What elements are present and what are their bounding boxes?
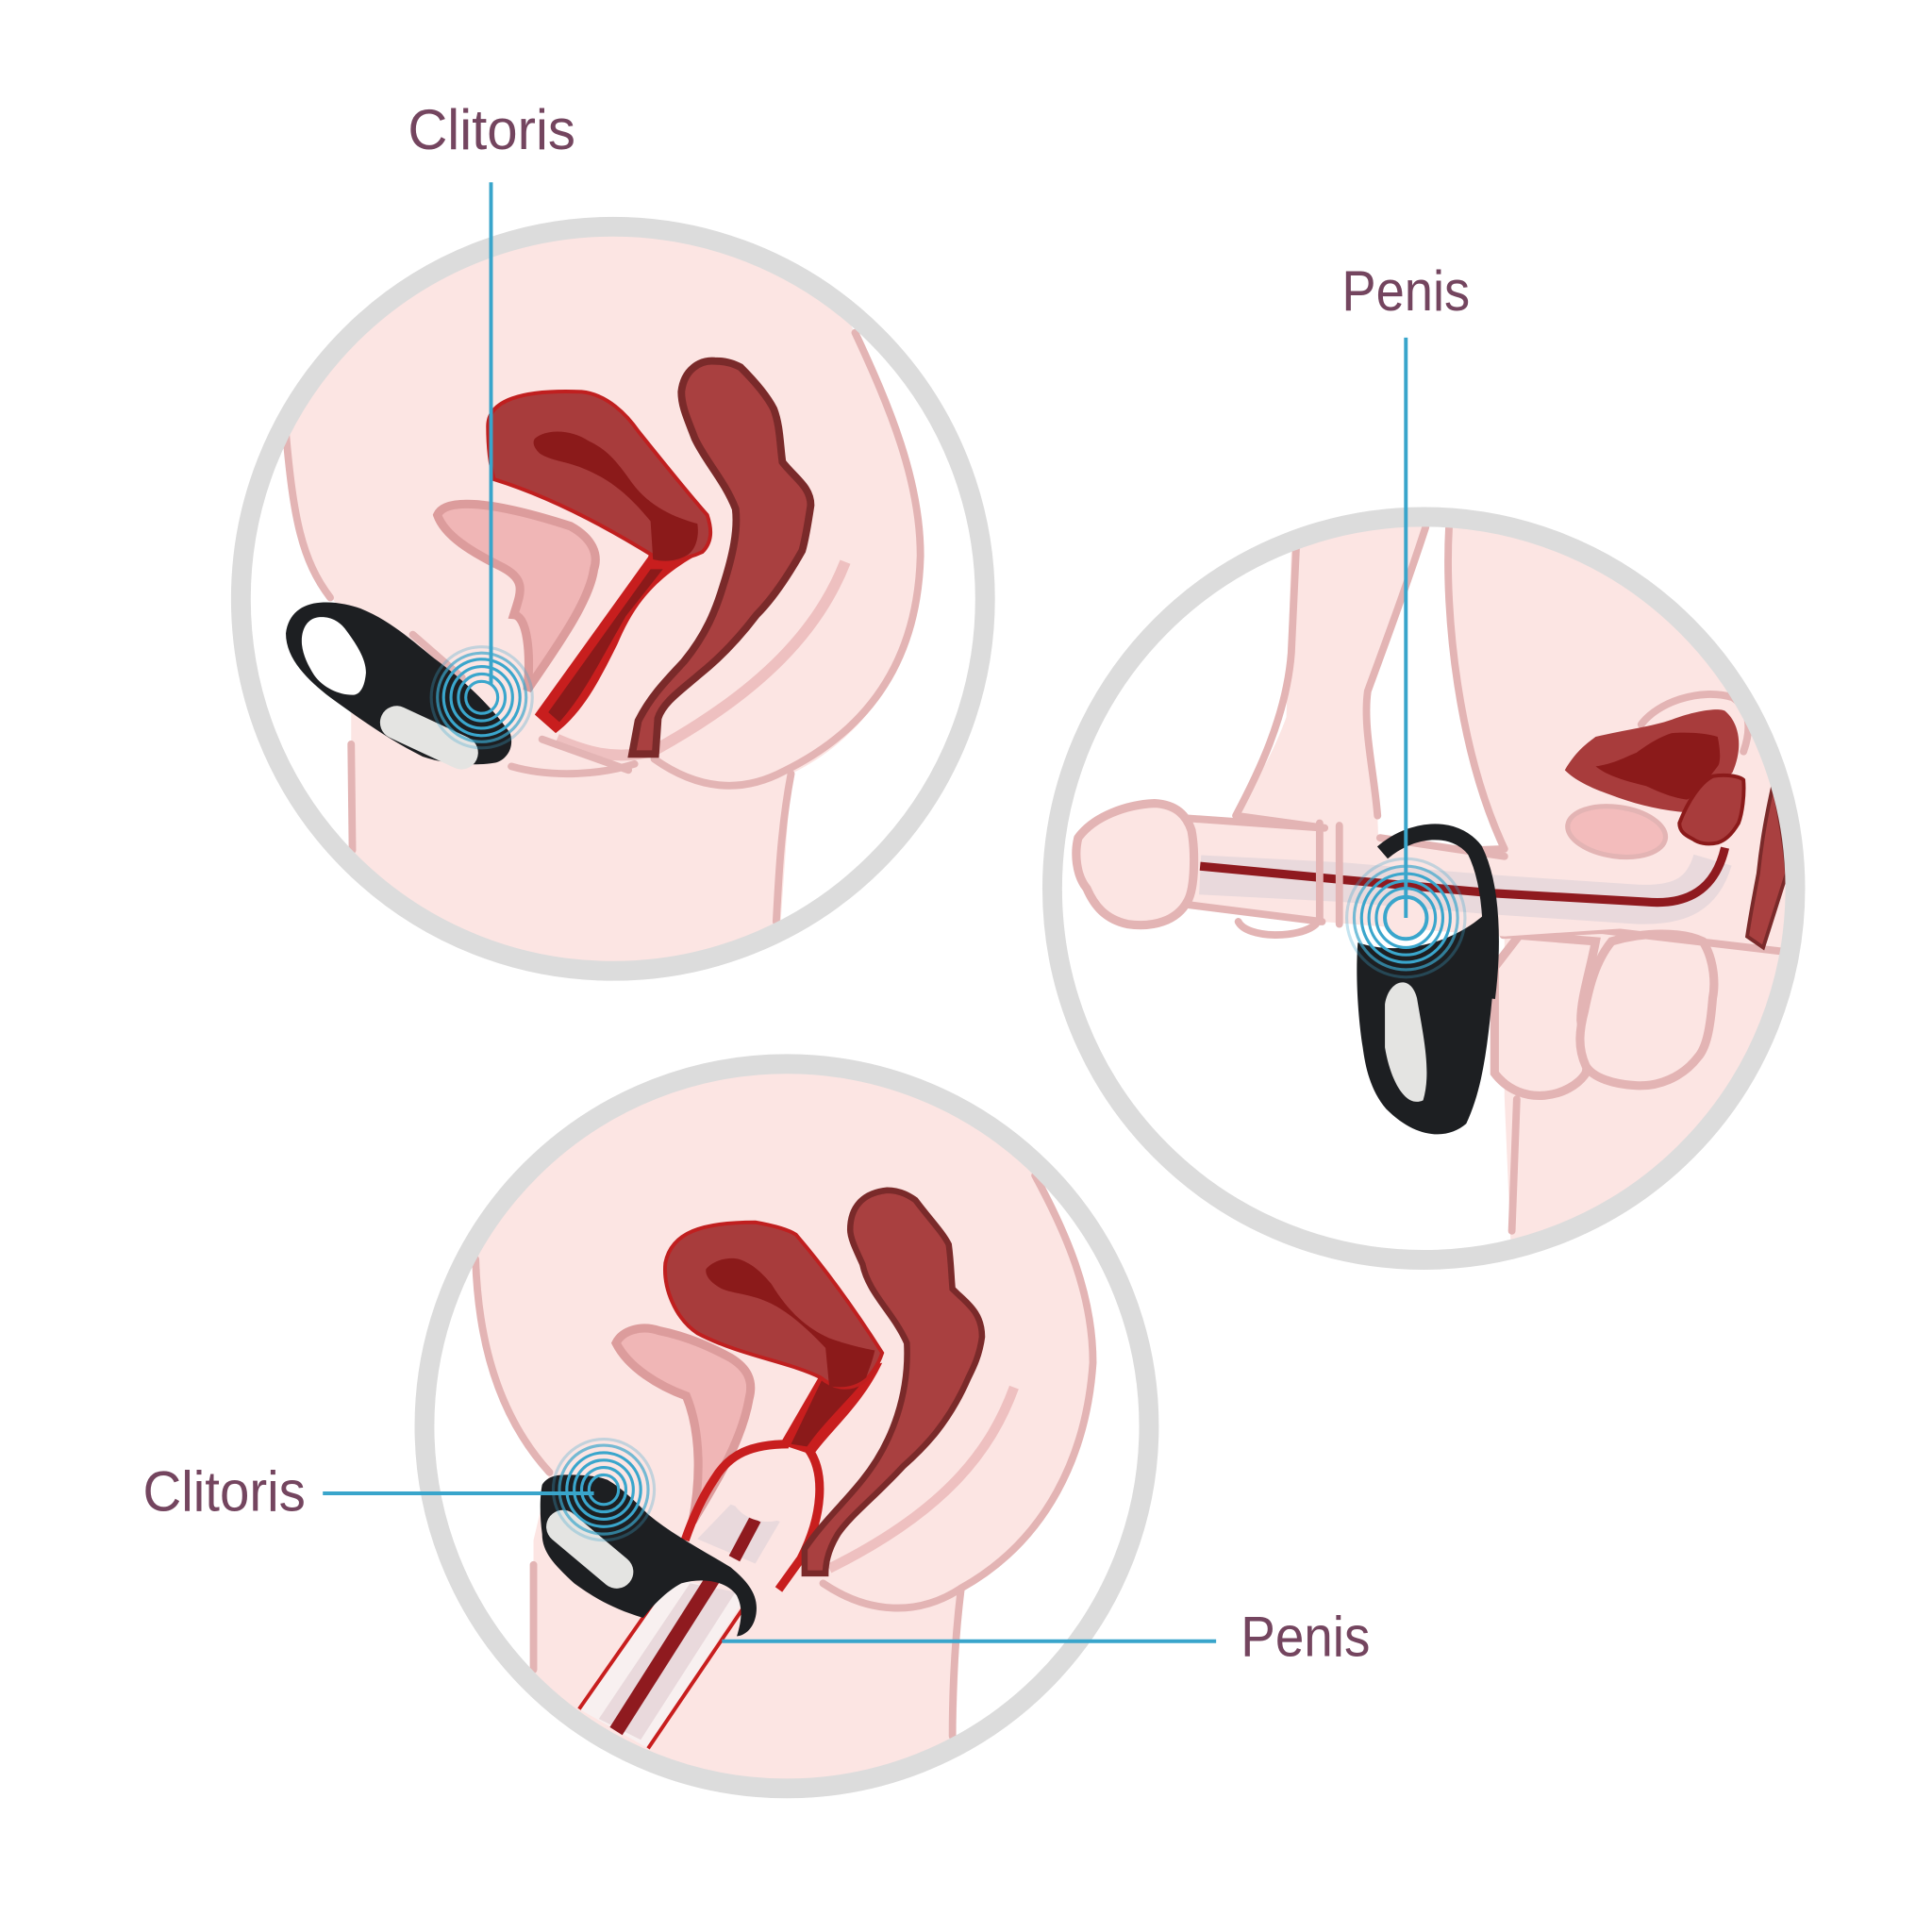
device: cock ring [540,1474,757,1637]
leader line: top-left [490,182,492,684]
ring frame [241,226,985,971]
button [1385,982,1426,1102]
label: right Penis: Penis [1341,259,1470,323]
canal around penis [685,1444,820,1590]
penis stripe upper [734,1519,756,1558]
uterus [665,1223,882,1388]
canal [780,1363,882,1456]
vaginal canal [535,515,711,733]
bladder [1565,709,1739,812]
device: cock ring [1357,832,1493,1134]
body outlines [475,1175,1093,1736]
rectum [632,361,810,754]
body fill [290,236,917,961]
internal organs [438,361,810,754]
uterus [488,391,710,559]
button [375,700,484,774]
button [540,1504,641,1595]
vibration ripples [431,647,532,748]
prostate [1679,775,1744,843]
rectum [805,1191,982,1574]
testis far [1494,935,1595,1095]
bladder outline [1641,694,1748,752]
bladder inner [1595,733,1720,800]
shaft outline [1185,818,1505,922]
label: top-left Clitoris: Clitoris [408,98,575,161]
ring frame [425,1064,1149,1789]
vibration ripples [553,1440,655,1541]
label: bottom Penis: Penis [1241,1605,1370,1668]
pubic bone [1564,800,1669,863]
ring frame [1052,517,1795,1260]
body outlines [286,333,921,922]
leader line: bottom left [323,1492,594,1495]
penis shaft [1185,818,1726,937]
outlines [1236,527,1780,1231]
leader line: bottom right [722,1640,1216,1642]
body fill [1452,528,1785,1240]
vibration ripples [1347,858,1465,977]
panel: top-left diagram [241,173,985,986]
urethra [1200,848,1725,903]
corpus band [1200,860,1713,905]
penis glans [729,1456,806,1522]
hole [302,617,366,695]
glans [1076,804,1194,925]
bladder [616,1328,751,1522]
penis upper tube [697,1505,780,1563]
panel: right diagram [1052,492,1848,1269]
hand on shaft [1239,823,1340,935]
penis lower shaft [579,1576,747,1748]
arm fill [1241,526,1422,836]
testis near [1580,934,1714,1086]
uterine cavity [534,431,698,561]
leader line: right [1405,338,1407,918]
body fill [477,1074,1089,1779]
canal inner [548,569,663,722]
uterine cavity [706,1258,874,1387]
rectum [1747,785,1787,947]
label: bottom Clitoris: Clitoris [143,1459,306,1523]
device: cock ring [286,602,511,774]
panel: bottom diagram [425,1010,1149,1824]
bladder [438,504,595,690]
canal inner [791,1377,866,1446]
